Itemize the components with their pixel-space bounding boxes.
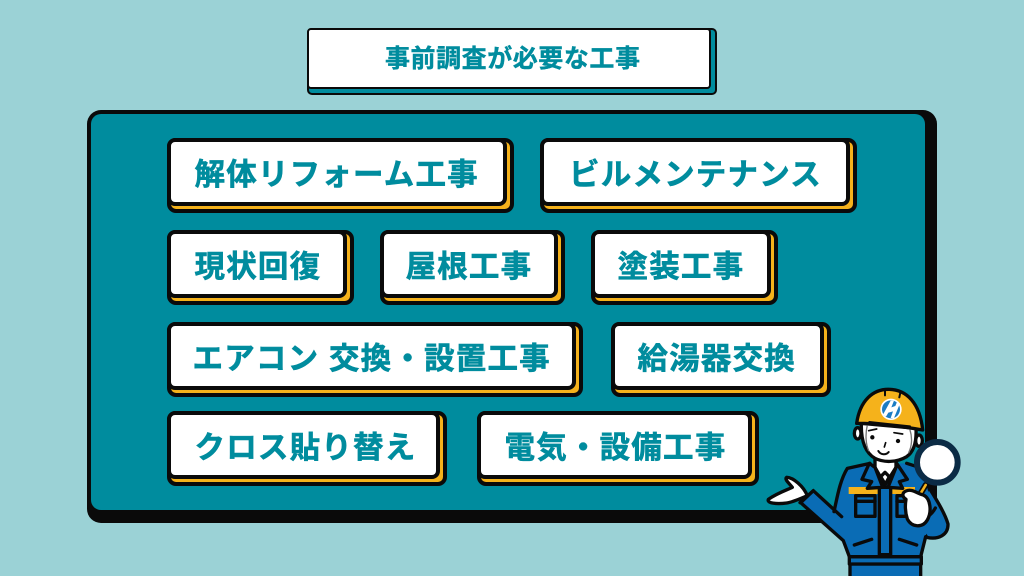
- button: エアコン 交換・設置工事: エアコン 交換・設置工事: [192, 342, 551, 376]
- jacket and left sleeve fill: [801, 463, 933, 557]
- button: 解体リフォーム工事: 解体リフォーム工事: [194, 158, 479, 192]
- button: 給湯器交換: [611, 322, 831, 397]
- button: ビルメンテナンス: ビルメンテナンス: [569, 158, 822, 192]
- ears: [854, 428, 922, 446]
- chest pockets: [856, 496, 907, 516]
- helmet logo: [880, 399, 902, 420]
- right sleeve: [917, 487, 948, 538]
- hair: [866, 425, 912, 453]
- waist pocket slashes: [854, 539, 917, 545]
- button: 電気・設備工事: [477, 411, 759, 486]
- button: 現状回復: [167, 230, 354, 305]
- button: クロス貼り替え: [167, 411, 447, 486]
- button: 電気・設備工事: 電気・設備工事: [504, 431, 726, 465]
- cuff line: [917, 508, 935, 519]
- placket: [879, 487, 891, 555]
- face: [869, 429, 903, 454]
- neck and shirt: [875, 458, 896, 485]
- button: 給湯器交換: 給湯器交換: [638, 342, 796, 376]
- trousers: [849, 557, 921, 576]
- title text: 事前調査が必要な工事: [385, 45, 641, 73]
- left hand: [768, 477, 807, 504]
- button: エアコン 交換・設置工事: [167, 322, 583, 397]
- title banner: [307, 28, 717, 95]
- button: 解体リフォーム工事: [167, 138, 514, 213]
- button: 屋根工事: 屋根工事: [406, 250, 532, 284]
- head: [861, 423, 916, 461]
- magnifying glass: [908, 442, 958, 514]
- jacket outlines: [800, 463, 926, 557]
- holding hand: [903, 490, 930, 526]
- button: 屋根工事: [380, 230, 565, 305]
- chest stripes: [849, 487, 915, 494]
- button: クロス貼り替え: クロス貼り替え: [194, 431, 416, 465]
- main panel: [87, 110, 937, 523]
- button: 塗装工事: [591, 230, 778, 305]
- button: 現状回復: 現状回復: [194, 250, 321, 284]
- jacket collar: [862, 463, 907, 488]
- helmet: [857, 389, 923, 430]
- button: ビルメンテナンス: [540, 138, 857, 213]
- button: 塗装工事: 塗装工事: [618, 250, 744, 284]
- illustration: worker with magnifying glass: [766, 388, 961, 576]
